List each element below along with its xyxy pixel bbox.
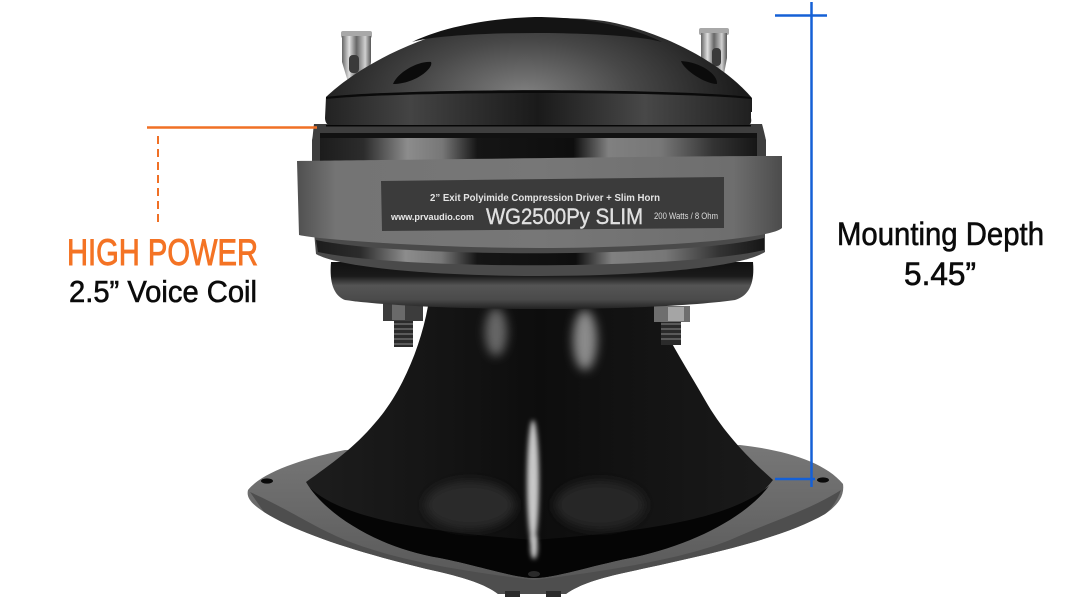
product label: WG2500Py SLIM [486,204,643,229]
product label: www.prvaudio.com [390,212,474,223]
dimension label: mounting depth: Mounting Depth [837,216,1044,252]
middle stepped ring [312,124,766,165]
callout text: high power: 2.5” Voice Coil [69,274,257,309]
product label: 200 Watts / 8 Ohm [654,211,718,222]
dimension line: mounting depth [775,2,827,487]
callout: voice coil leader lines [147,128,317,222]
lower motor housing [314,232,765,309]
gray flange with label [297,156,782,248]
horn body [306,306,773,578]
product photo: compression driver with slim horn [248,17,843,597]
callout text: high power [67,232,258,309]
product label [381,177,724,231]
wire terminals [341,28,729,82]
horn flange [248,445,843,597]
dimension label: mounting depth: 5.45” [904,256,976,292]
upper ring [325,90,751,126]
mounting bolts [383,303,690,347]
callout text: high power: HIGH POWER [67,232,258,273]
dome cap [326,17,752,112]
dimension label: mounting depth [837,216,1044,292]
product label: 2” Exit Polyimide Compression Driver + Slim Horn [430,193,660,204]
